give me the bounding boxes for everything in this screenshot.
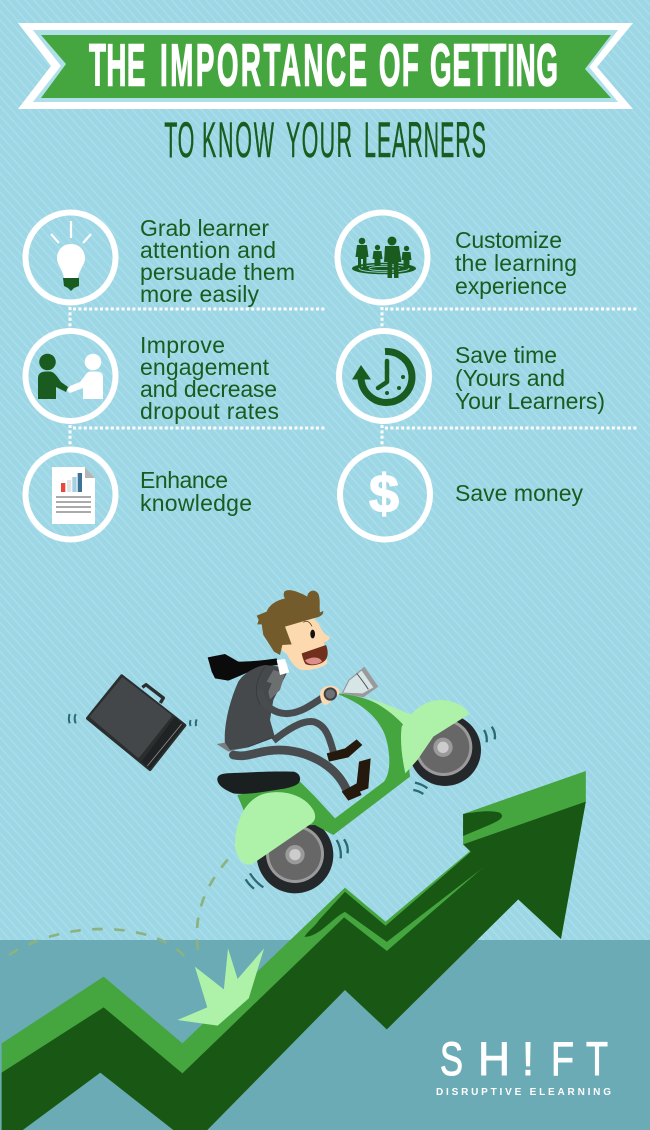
text: improve engagement: Improve bbox=[140, 332, 225, 358]
text: improve engagement: dropout rates bbox=[140, 398, 279, 424]
arrow upper dark fold bbox=[305, 852, 488, 942]
banner heading: IMPORTANCE bbox=[160, 32, 367, 98]
subtitle: YOUR bbox=[286, 113, 352, 169]
shoes bbox=[327, 739, 362, 762]
banner heading: THE bbox=[89, 32, 145, 98]
text: grab attention: persuade them bbox=[140, 259, 295, 285]
text: improve engagement: and decrease bbox=[140, 376, 277, 402]
briefcase body bbox=[88, 676, 185, 769]
logo wordmark: T bbox=[586, 1032, 608, 1085]
item: save money bbox=[340, 450, 584, 540]
front mudguard bbox=[401, 700, 469, 773]
logo bbox=[436, 1032, 611, 1098]
scooter body bbox=[237, 693, 410, 835]
front wheel bbox=[409, 714, 481, 786]
briefcase motion marks bbox=[69, 714, 197, 726]
text: customize: experience bbox=[455, 273, 567, 299]
rear leg bbox=[233, 750, 347, 790]
subtitle bbox=[164, 113, 486, 169]
item: improve engagement bbox=[26, 331, 279, 424]
arrow main dark body bbox=[2, 802, 586, 1130]
arrow head notch bbox=[463, 811, 502, 836]
shirt collar bbox=[277, 659, 289, 675]
text: customize: the learning bbox=[455, 250, 577, 276]
eye bbox=[310, 630, 315, 638]
text: save money: Save money bbox=[455, 480, 584, 506]
logo wordmark: H bbox=[478, 1032, 510, 1085]
dotted connectors bbox=[70, 307, 638, 446]
front leg bbox=[273, 721, 333, 752]
banner green ribbon bbox=[41, 35, 611, 98]
icon: clock with arrow bbox=[339, 331, 429, 421]
text: save time: Your Learners) bbox=[455, 388, 605, 414]
rider bbox=[208, 654, 378, 801]
hair bbox=[257, 590, 323, 655]
title banner bbox=[18, 23, 633, 109]
banner heading: GETTING bbox=[430, 32, 558, 98]
dashed bounce path bbox=[9, 857, 230, 959]
item: customize bbox=[338, 212, 577, 302]
rising arrow chart bbox=[2, 771, 586, 1130]
logo tagline: DISRUPTIVE ELEARNING bbox=[436, 1087, 611, 1098]
motion marks bbox=[246, 727, 495, 889]
banner inner pale channel bbox=[33, 30, 618, 102]
scooter bbox=[235, 693, 495, 893]
text: customize: Customize bbox=[455, 227, 562, 253]
text: enhance knowledge: knowledge bbox=[140, 490, 252, 516]
text: grab attention: Grab learner bbox=[140, 215, 269, 241]
water band bbox=[0, 940, 650, 1130]
icon: report document bbox=[26, 450, 116, 540]
icon: dollar sign bbox=[340, 450, 430, 540]
subtitle: KNOW bbox=[202, 113, 274, 169]
icon: light bulb bbox=[26, 212, 116, 302]
item: save time bbox=[339, 331, 605, 421]
text: improve engagement: engagement bbox=[140, 354, 270, 380]
headlight bbox=[342, 667, 378, 697]
banner white outline bbox=[18, 23, 633, 109]
rider head bbox=[257, 590, 330, 675]
logo wordmark: S bbox=[440, 1032, 463, 1085]
icon: handshake bbox=[26, 331, 116, 421]
text: save time: (Yours and bbox=[455, 365, 565, 391]
logo wordmark: ! bbox=[522, 1032, 534, 1085]
briefcase bbox=[69, 676, 197, 769]
seat bbox=[217, 771, 300, 794]
icon: dollar sign: $ bbox=[369, 464, 399, 524]
text: grab attention: attention and bbox=[140, 237, 276, 263]
arm bbox=[260, 690, 324, 714]
hand and grip bbox=[320, 686, 340, 705]
logo wordmark: F bbox=[551, 1032, 574, 1085]
item: grab attention bbox=[26, 212, 295, 307]
text: grab attention: more easily bbox=[140, 281, 260, 307]
mouth bbox=[302, 645, 328, 665]
banner heading: OF bbox=[379, 32, 419, 98]
impact splash bbox=[177, 948, 264, 1026]
rear wheel bbox=[257, 817, 333, 893]
subtitle: LEARNERS bbox=[364, 113, 486, 169]
subtitle: TO bbox=[164, 113, 194, 169]
banner heading bbox=[89, 32, 558, 98]
icon: group of people bbox=[338, 212, 428, 302]
rear mudguard bbox=[235, 792, 315, 865]
briefcase handle bbox=[142, 685, 163, 703]
arrow light band bbox=[2, 771, 586, 1130]
suit jacket bbox=[225, 665, 287, 751]
face bbox=[281, 618, 330, 670]
necktie bbox=[208, 654, 278, 681]
text: enhance knowledge: Enhance bbox=[140, 467, 228, 493]
item: enhance knowledge bbox=[26, 450, 252, 540]
text: save time: Save time bbox=[455, 342, 557, 368]
